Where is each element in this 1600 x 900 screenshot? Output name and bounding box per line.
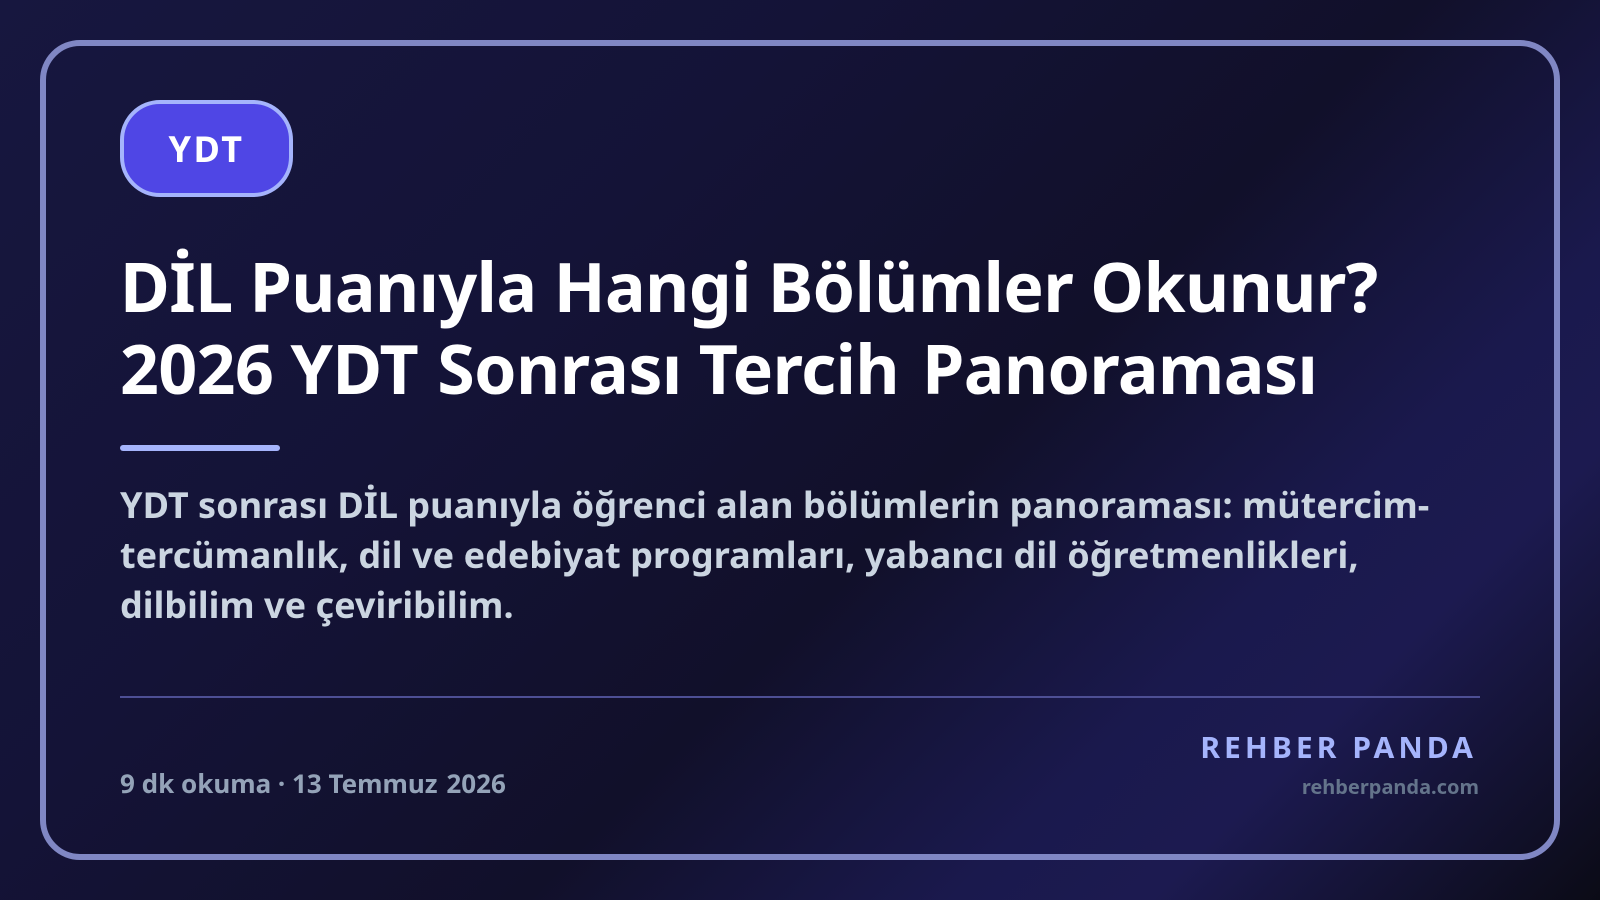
accent bar — [120, 445, 280, 451]
category badge — [120, 100, 293, 197]
description: tercümanlık, dil ve edebiyat programları, yabancı dil öğretmenlikleri, — [120, 530, 1359, 579]
divider — [120, 696, 1480, 698]
description — [120, 480, 1429, 629]
description: YDT sonrası DİL puanıyla öğrenci alan bölümlerin panoraması: mütercim- — [120, 480, 1429, 529]
title: 2026 YDT Sonrası Tercih Panoraması — [120, 321, 1317, 414]
brand name: REHBER PANDA — [1200, 726, 1477, 767]
reading time and date: 9 dk okuma · 13 Temmuz 2026 — [120, 765, 506, 801]
title: DİL Puanıyla Hangi Bölümler Okunur? — [120, 239, 1378, 332]
category badge: YDT — [168, 124, 245, 173]
description: dilbilim ve çeviribilim. — [120, 580, 514, 629]
website: rehberpanda.com — [1302, 773, 1479, 800]
title — [120, 239, 1378, 414]
